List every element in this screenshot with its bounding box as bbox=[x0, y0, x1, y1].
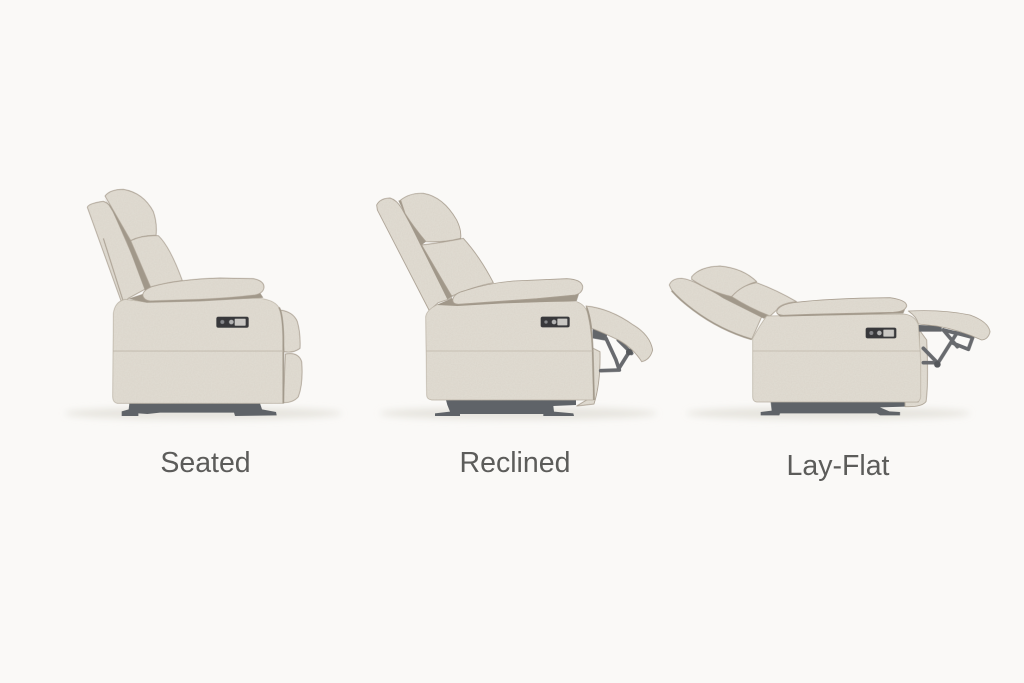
back panel of footrest bbox=[905, 330, 928, 407]
side shadow bbox=[279, 307, 283, 403]
arm shadow bbox=[437, 293, 579, 306]
back underside shadow bbox=[672, 291, 752, 339]
control panel bbox=[216, 317, 249, 328]
back panel bbox=[669, 278, 762, 339]
seam bbox=[753, 350, 921, 352]
seam bbox=[426, 350, 593, 352]
footrest bbox=[908, 311, 990, 340]
headrest bbox=[105, 189, 156, 241]
label: seated: Seated bbox=[160, 447, 251, 479]
recliner: seated bbox=[65, 189, 342, 420]
base bbox=[435, 400, 576, 416]
back panel of footrest bbox=[577, 347, 600, 406]
floor shadow bbox=[380, 407, 657, 420]
arm shadow bbox=[128, 293, 263, 303]
recliner: lay-flat bbox=[669, 266, 990, 420]
back panel bbox=[377, 198, 452, 311]
headrest bbox=[692, 266, 757, 297]
recliner: reclined bbox=[377, 193, 657, 420]
mechanism bbox=[918, 325, 973, 368]
base bbox=[122, 403, 277, 416]
mechanism bbox=[593, 328, 633, 371]
control panel bbox=[541, 317, 570, 327]
back panel bbox=[87, 201, 147, 304]
footrest bbox=[586, 306, 653, 362]
back crease bbox=[103, 238, 123, 302]
headrest bbox=[401, 193, 461, 242]
lumbar cushion bbox=[422, 238, 493, 296]
back shadow bbox=[104, 198, 152, 291]
chair body bbox=[426, 300, 593, 400]
arm shadow bbox=[777, 309, 905, 317]
control panel bbox=[866, 328, 896, 338]
armrest bbox=[143, 278, 264, 301]
chair body bbox=[753, 314, 921, 402]
label: lay-flat: Lay-Flat bbox=[787, 450, 890, 482]
label: reclined: Reclined bbox=[460, 447, 570, 479]
armrest bbox=[777, 298, 907, 315]
front cushions bbox=[280, 310, 302, 403]
base bbox=[761, 402, 905, 415]
lumbar cushion bbox=[131, 236, 182, 287]
lumbar cushion bbox=[732, 283, 797, 316]
floor shadow bbox=[687, 407, 970, 420]
back shadow bbox=[398, 200, 453, 299]
seam bbox=[113, 350, 283, 352]
chair body bbox=[113, 298, 283, 403]
head shadow bbox=[692, 278, 770, 319]
floor shadow bbox=[65, 407, 342, 420]
armrest bbox=[453, 279, 583, 304]
side shadow bbox=[587, 307, 594, 400]
